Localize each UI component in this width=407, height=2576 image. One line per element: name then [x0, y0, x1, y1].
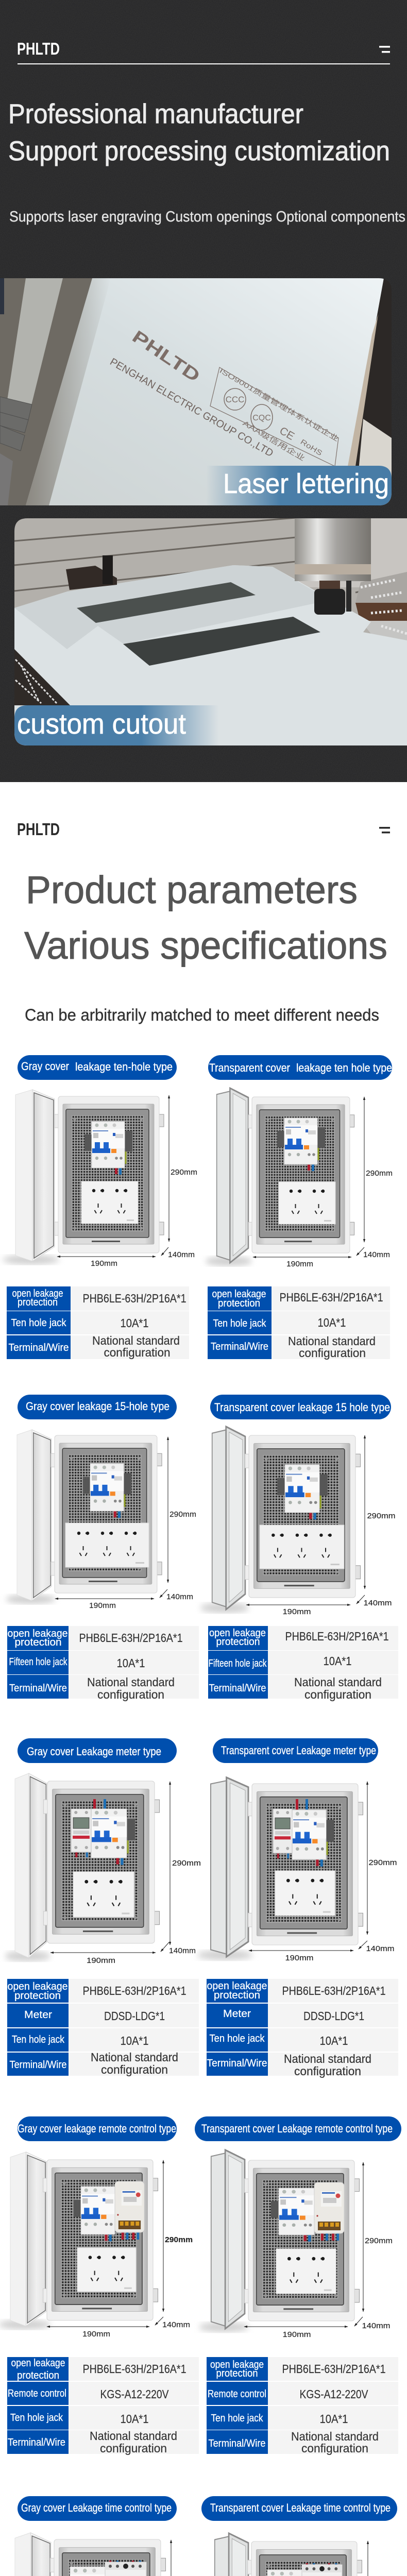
product photo: transparent cover 15-hole: 290mm	[367, 1512, 396, 1520]
spec table: transparent cover remote control: Terminal/Wire	[208, 2438, 266, 2449]
heading: professional manufacturer: Professional manufacturer	[8, 99, 303, 129]
pill: gray cover 15-hole	[18, 1395, 177, 1419]
pill: gray cover meter	[18, 1738, 177, 1763]
icon: menu dark	[379, 827, 390, 834]
spec table: gray cover remote control	[7, 2357, 199, 2455]
spec table: transparent cover meter: open leakage	[207, 1980, 267, 1992]
spec table: transparent cover meter: configuration	[294, 2064, 361, 2078]
spec table: transparent cover meter: Terminal/Wire	[207, 2058, 267, 2069]
spec table: transparent cover remote control: PHB6LE-63H/2P16A*1	[282, 2362, 385, 2376]
spec table: transparent cover remote control: 10A*1	[319, 2412, 348, 2426]
product photo: transparent cover 15-hole	[200, 1427, 396, 1616]
product photo: gray cover time control	[3, 2533, 201, 2576]
spec table: transparent cover ten-hole: protection	[218, 1298, 260, 1309]
pill: gray cover 15-hole: Gray cover leakage 15-hole type	[26, 1400, 169, 1413]
product photo: transparent cover 15-hole: 140mm	[364, 1599, 392, 1607]
spec table: gray cover meter: 10A*1	[121, 2034, 148, 2047]
spec table: gray cover remote control: KGS-A12-220V	[100, 2387, 169, 2401]
spec table: gray cover remote control: National standard	[90, 2429, 177, 2443]
spec table: gray cover 15-hole: National standard	[87, 1675, 175, 1689]
spec table: gray cover meter: protection	[14, 1990, 61, 2002]
product photo: transparent cover remote control: 140mm	[362, 2321, 391, 2330]
product photo: gray cover ten-hole: 290mm	[171, 1168, 197, 1177]
product photo: transparent cover meter	[197, 1777, 397, 1962]
spec table: gray cover meter: Terminal/Wire	[9, 2059, 67, 2071]
spec table: gray cover 15-hole: Terminal/Wire	[9, 1683, 67, 1694]
product photo: transparent cover time control	[202, 2533, 398, 2576]
spec table: transparent cover meter: protection	[214, 1990, 260, 2001]
product photo: gray cover remote control: 140mm	[162, 2320, 190, 2329]
spec table: gray cover 15-hole: open leakage	[7, 1628, 68, 1639]
spec table: transparent cover ten-hole: National standard	[288, 1334, 376, 1348]
spec table: transparent cover remote control: Ten hole jack	[211, 2413, 263, 2424]
pill: gray cover ten-hole: Gray cover	[21, 1060, 69, 1073]
spec table: transparent cover 15-hole: National standard	[294, 1675, 382, 1689]
product photo: transparent cover 15-hole: 190mm	[282, 1607, 311, 1616]
product photo: gray cover ten-hole: 190mm	[91, 1259, 117, 1268]
product photo: gray cover meter: 140mm	[169, 1946, 196, 1955]
laser engraved certification box	[210, 367, 340, 466]
spec table: gray cover ten-hole: Terminal/Wire	[8, 1342, 69, 1353]
product photo: gray cover meter: 190mm	[87, 1956, 115, 1965]
spec table: transparent cover 15-hole: protection	[216, 1636, 260, 1648]
product photo: transparent cover meter: 190mm	[285, 1954, 313, 1962]
spec table: gray cover remote control: Terminal/Wire	[8, 2437, 65, 2448]
panel: dark customization section	[0, 0, 407, 782]
laser engraved certification box: AAA级信用企业	[241, 419, 307, 463]
photo: custom cutout machining	[14, 518, 407, 745]
spec table: gray cover ten-hole: National standard	[92, 1334, 180, 1347]
spec table: transparent cover 15-hole: Fifteen hole jack	[208, 1658, 267, 1669]
label band: custom cutout: custom cutout	[17, 707, 186, 740]
spec table: transparent cover 15-hole: configuration	[304, 1688, 371, 1701]
spec table: transparent cover ten-hole: open leakage	[212, 1289, 266, 1300]
laser engraved company name: PENGHAN ELECTRIC GROUP CO.,LTD	[108, 356, 275, 459]
product photo: gray cover remote control: 290mm	[165, 2235, 193, 2244]
product photo: transparent cover ten-hole: 290mm	[366, 1169, 393, 1178]
spec table: transparent cover remote control: KGS-A12-220V	[300, 2387, 368, 2401]
spec table: gray cover ten-hole: configuration	[104, 1346, 170, 1359]
spec table: transparent cover meter: PHB6LE-63H/2P16A*1	[282, 1984, 385, 1997]
spec table: gray cover remote control: configuration	[100, 2442, 167, 2455]
spec table: gray cover meter: National standard	[91, 2050, 178, 2064]
spec table: transparent cover meter: Meter	[223, 2008, 251, 2020]
spec table: gray cover ten-hole: protection	[18, 1297, 58, 1308]
spec table: gray cover 15-hole: protection	[14, 1637, 62, 1648]
spec table: transparent cover ten-hole: PHB6LE-63H/2P16A*1	[279, 1291, 383, 1304]
photo: laser lettering on enclosure	[0, 278, 392, 505]
laser engraved certification box: CQC	[252, 414, 271, 422]
logo: PHLTD dark: PHLTD	[17, 820, 60, 839]
product photo: gray cover remote control	[0, 2152, 193, 2338]
icon: menu white	[379, 46, 390, 53]
spec table: gray cover remote control: protection	[17, 2370, 59, 2381]
spec table: gray cover ten-hole	[7, 1286, 189, 1359]
product photo: gray cover meter	[5, 1773, 201, 1965]
product photo: transparent cover remote control	[199, 2150, 393, 2339]
product photo: gray cover meter: 290mm	[172, 1859, 201, 1868]
pill: transparent cover ten-hole: leakage ten hole type	[296, 1061, 392, 1074]
product photo: gray cover remote control: 190mm	[82, 2330, 110, 2338]
spec table: gray cover remote control: open leakage	[11, 2358, 65, 2369]
product photo: transparent cover ten-hole	[205, 1088, 393, 1268]
heading: product parameters: Product parameters	[26, 868, 358, 911]
spec table: transparent cover meter: DDSD-LDG*1	[303, 2009, 364, 2023]
heading: support processing customization: Support processing customization	[8, 136, 390, 166]
pill: gray cover ten-hole	[18, 1055, 177, 1080]
pill: transparent cover 15-hole	[210, 1395, 391, 1419]
spec table: gray cover remote control: PHB6LE-63H/2P16A*1	[82, 2362, 186, 2376]
spec table: gray cover meter: PHB6LE-63H/2P16A*1	[82, 1984, 186, 1997]
laser engraved certification box: RoHS	[299, 437, 324, 457]
product photo: gray cover 15-hole: 140mm	[166, 1592, 193, 1601]
spec table: gray cover meter: configuration	[101, 2063, 168, 2076]
laser engraved certification box: ISO9001质量管理体系认证企业	[218, 367, 340, 443]
pill: transparent cover time control	[201, 2496, 397, 2521]
product photo: gray cover ten-hole: 140mm	[168, 1250, 195, 1259]
product photo: gray cover ten-hole	[3, 1090, 197, 1268]
product photo: gray cover 15-hole	[6, 1430, 196, 1610]
spec table: gray cover remote control: 10A*1	[121, 2412, 148, 2426]
spec table: transparent cover remote control	[207, 2357, 398, 2455]
spec table: transparent cover meter	[207, 1979, 398, 2078]
product photo: transparent cover meter: 140mm	[366, 1944, 395, 1953]
spec table: gray cover 15-hole: configuration	[97, 1688, 164, 1701]
spec table: transparent cover remote control: protection	[216, 2368, 258, 2379]
laser engraved certification box: CCC	[226, 395, 244, 404]
spec table: gray cover meter: DDSD-LDG*1	[104, 2009, 165, 2023]
product photo: transparent cover ten-hole: 190mm	[286, 1260, 313, 1268]
product photo: gray cover 15-hole: 190mm	[89, 1601, 116, 1610]
spec table: transparent cover 15-hole	[208, 1626, 398, 1701]
spec table: transparent cover meter: 10A*1	[319, 2034, 348, 2047]
spec table: transparent cover ten-hole: Terminal/Wire	[211, 1341, 268, 1352]
spec table: transparent cover remote control: configuration	[301, 2442, 368, 2455]
spec table: gray cover ten-hole: Ten hole jack	[11, 1317, 66, 1329]
spec table: gray cover 15-hole: Fifteen hole jack	[9, 1656, 67, 1668]
spec table: transparent cover remote control: Remote control	[208, 2388, 266, 2400]
spec table: transparent cover 15-hole: 10A*1	[324, 1654, 351, 1668]
pill: transparent cover meter	[213, 1738, 378, 1763]
pill: gray cover remote control	[18, 2116, 177, 2141]
spec table: gray cover remote control: Ten hole jack	[10, 2412, 63, 2424]
spec table: transparent cover 15-hole: Terminal/Wire	[209, 1683, 266, 1694]
spec table: gray cover 15-hole: PHB6LE-63H/2P16A*1	[79, 1631, 182, 1645]
laser engraved certification box: CE	[277, 425, 296, 443]
pill: gray cover meter: Gray cover Leakage meter type	[27, 1745, 161, 1758]
pill: gray cover ten-hole: leakage ten-hole type	[75, 1060, 173, 1073]
spec table: transparent cover ten-hole	[208, 1286, 390, 1360]
label band: laser lettering	[206, 466, 392, 505]
pill: gray cover time control: Gray cover Leakage time control type	[21, 2501, 172, 2514]
product photo: transparent cover meter: 290mm	[369, 1858, 397, 1867]
spec table: gray cover 15-hole: 10A*1	[116, 1656, 145, 1670]
product photo: transparent cover remote control: 290mm	[365, 2236, 393, 2245]
spec table: gray cover meter: Ten hole jack	[12, 2034, 65, 2045]
spec table: gray cover ten-hole: open leakage	[12, 1288, 63, 1299]
spec table: gray cover meter	[7, 1979, 199, 2076]
logo: PHLTD white: PHLTD	[17, 39, 60, 58]
pill: transparent cover ten-hole	[208, 1055, 392, 1080]
spec table: transparent cover meter: National standard	[284, 2052, 371, 2065]
spec table: transparent cover remote control: National standard	[291, 2430, 379, 2443]
spec table: gray cover meter: open leakage	[7, 1981, 68, 1992]
spec table: gray cover meter: Meter	[24, 2009, 52, 2021]
pill: transparent cover ten-hole: Transparent cover	[209, 1061, 290, 1074]
spec table: gray cover ten-hole: 10A*1	[121, 1316, 148, 1330]
laser engraved logo: PHLTD	[129, 327, 204, 386]
spec table: transparent cover 15-hole: PHB6LE-63H/2P16A*1	[285, 1630, 388, 1643]
label band: laser lettering: Laser lettering	[223, 468, 389, 499]
spec table: gray cover ten-hole: PHB6LE-63H/2P16A*1	[82, 1292, 186, 1305]
product photo: gray cover 15-hole: 290mm	[169, 1510, 196, 1519]
spec table: transparent cover ten-hole: configuration	[299, 1346, 366, 1360]
subheading: matching statement: Can be arbitrarily matched to meet different needs	[25, 1006, 379, 1024]
pill: transparent cover remote control	[195, 2116, 401, 2141]
spec table: transparent cover ten-hole: 10A*1	[317, 1316, 346, 1329]
spec table: transparent cover 15-hole: open leakage	[209, 1628, 266, 1639]
spec table: transparent cover meter: Ten hole jack	[209, 2033, 265, 2044]
product photo: transparent cover remote control: 190mm	[282, 2330, 311, 2339]
heading: various specifications: Various specifications	[24, 924, 387, 967]
spec table: transparent cover ten-hole: Ten hole jack	[213, 1318, 266, 1329]
spec table: gray cover remote control: Remote control	[8, 2388, 66, 2399]
pill: gray cover remote control: Gray cover leakage remote control type	[18, 2122, 176, 2135]
spec table: gray cover 15-hole	[7, 1626, 199, 1701]
product photo: transparent cover ten-hole: 140mm	[363, 1250, 390, 1259]
spec table: transparent cover remote control: open leakage	[210, 2359, 264, 2370]
pill: gray cover time control	[18, 2496, 177, 2521]
